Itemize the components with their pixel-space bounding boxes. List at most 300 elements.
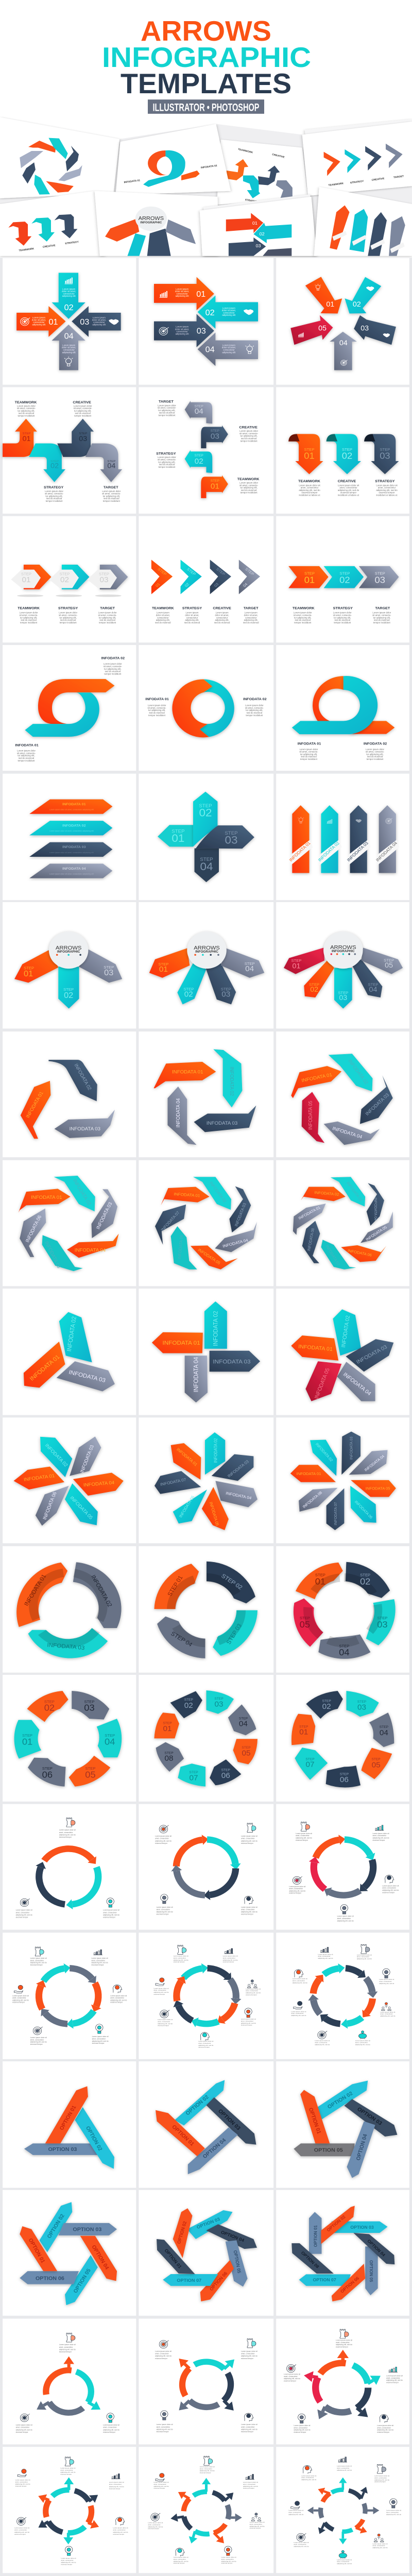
callout: mind: eiusmod tempor — [110, 2002, 123, 2004]
callout: mind — [241, 1896, 258, 1916]
panel: six 3D petals — [3, 1417, 136, 1543]
arrow 01: 01 — [326, 300, 335, 308]
callout: team: Lorem ipsum dolor sit — [246, 1988, 261, 1990]
callout: idea: adipiscing elit, sed do — [386, 2513, 401, 2515]
center badge: INFOGRAPHIC — [332, 950, 355, 953]
callout: strategy: eiusmod tempor — [374, 2481, 386, 2483]
callout: strategy: eiusmod tempor — [59, 2351, 72, 2353]
label: teamwork: amet, consectetur — [301, 486, 319, 489]
card: chevrons: CREATIVE — [371, 177, 385, 182]
option 01: OPTION 01 — [59, 2105, 78, 2131]
arrow 04: INFODATA 04 — [193, 1357, 200, 1392]
petal 07: INFODATA 07 — [333, 1502, 338, 1525]
label: infodata 02: sed do eiusmod — [367, 755, 383, 758]
arrow 01 — [3, 419, 37, 457]
label: creative: CREATIVE — [338, 480, 356, 483]
option 08 — [291, 2243, 334, 2274]
callout: savings: adipiscing elit, sed do — [337, 2563, 352, 2565]
label: teamwork: Lorem ipsum dolor — [20, 612, 38, 614]
petal 05 — [65, 1483, 98, 1525]
arc 03: 03 — [377, 1620, 388, 1630]
ring arrows — [39, 1849, 98, 1904]
arrow slate — [323, 2406, 351, 2412]
ribbon 06: INFODATA 06 — [347, 1248, 372, 1258]
block 03: STEP — [84, 1700, 94, 1704]
callout: target: eiusmod tempor — [30, 2043, 43, 2045]
block 07: STEP — [305, 1758, 315, 1761]
arc 01: STEP — [315, 1573, 325, 1577]
petal 02: INFODATA 02 — [315, 1442, 334, 1463]
callout: mind: Lorem ipsum dolor sit — [293, 1978, 307, 1980]
ring arrows — [39, 1968, 98, 2024]
ribbon 02 — [213, 1049, 242, 1108]
petal 02 — [40, 1437, 72, 1477]
petal 05 — [351, 1480, 396, 1497]
callout: idea — [92, 2024, 109, 2044]
arrow 02: 02 — [310, 986, 318, 993]
label: strategy — [44, 486, 64, 502]
panel: four arc arrows — [139, 1546, 273, 1673]
arc 04: STEP — [339, 1644, 349, 1648]
badge: ILLUSTRATOR • PHOTOSHOP — [152, 101, 260, 114]
chevron 02: 02 — [184, 582, 190, 588]
label: infodata 01 — [145, 698, 169, 717]
ribbon 07: INFODATA 07 — [324, 1244, 341, 1266]
ribbon 02: INFODATA 02 — [314, 1190, 339, 1197]
callout: finance: adipiscing elit, sed do — [15, 2483, 30, 2485]
petal 05 — [202, 1487, 229, 1530]
label: strategy: sed do eiusmod — [159, 463, 175, 466]
label: infodata 01: tur adipiscing elit, — [18, 754, 35, 757]
option 03: OPTION 03 — [217, 2108, 242, 2131]
arrow 04: 04 — [64, 332, 74, 341]
callout: strategy: eiusmod tempor — [174, 1961, 185, 1963]
callout: target: Lorem ipsum dolor sit — [315, 2040, 330, 2042]
callout: strategy: adipiscing elit, sed do — [336, 2344, 352, 2346]
arrow 03: consectetur — [176, 330, 188, 333]
label: strategy: Lorem ipsum dolor — [45, 490, 64, 493]
label: teamwork: Lorem ipsum dolor — [294, 612, 312, 614]
chevron 02 — [181, 560, 202, 594]
label: infodata 02: INFODATA 02 — [101, 657, 125, 660]
callout: finance: amet, consectetur — [291, 2012, 304, 2014]
callout: idea — [157, 2411, 173, 2433]
panel: six-arrow circle — [3, 1933, 136, 2059]
label: teamwork: adipiscing elit, sed do — [299, 489, 320, 492]
panel: curled down arrows — [276, 387, 409, 514]
ribbon 03 — [92, 1189, 117, 1238]
option 04 — [353, 2233, 394, 2264]
callout: mind: amet, consectetur — [241, 1909, 255, 1911]
ribbon 06 — [20, 1209, 46, 1257]
arrow 02 — [29, 444, 65, 482]
chevron 02: 02 — [339, 575, 350, 585]
callout: idea: adipiscing elit, sed do — [379, 1982, 394, 1985]
label: infodata 02: tempor incididunt — [246, 714, 263, 717]
callout: finance: amet, consectetur — [153, 2483, 166, 2485]
center badge — [187, 931, 227, 969]
arrow 02 — [193, 792, 217, 846]
label: strategy: Lorem ipsum dolor — [59, 612, 78, 614]
petal 05: INFODATA 05 — [366, 1486, 390, 1491]
panel: option pentagon — [276, 2061, 409, 2188]
callout: target: Lorem ipsum dolor sit — [16, 2424, 32, 2426]
callout: mind: adipiscing elit, sed do — [113, 2531, 128, 2533]
callout: idea: adipiscing elit, sed do — [294, 2429, 311, 2431]
callout: growth — [337, 2457, 352, 2471]
arrow 04: adipiscing elit — [62, 351, 76, 353]
arc 03 — [28, 1628, 108, 1658]
label: target: tur adipiscing elit, — [373, 616, 390, 619]
callout: target: Lorem ipsum dolor sit — [155, 2350, 171, 2352]
block 07 — [295, 1748, 328, 1780]
bar 04: Lorem ipsum dolor sit amet, consectetur adipiscing elit — [49, 873, 94, 875]
callout: idea: Lorem ipsum dolor sit — [92, 2036, 109, 2038]
callout: growth: amet, consectetur — [223, 1957, 235, 1959]
arrow 01: adipiscing elit — [32, 324, 46, 326]
ribbon 03 — [229, 1187, 251, 1232]
arrow 01: STEP — [171, 828, 185, 834]
arrow 03 — [334, 968, 352, 1009]
callout: strategy: Lorem ipsum dolor sit — [357, 1954, 372, 1956]
label: strategy: incididunt ut labore et — [376, 494, 398, 496]
callout: idea: eiusmod tempor — [221, 2562, 232, 2564]
callout: target: adipiscing elit, sed do — [289, 1890, 305, 1892]
label: creative: amet, consectetur — [339, 486, 357, 489]
callout: strategy: adipiscing elit, sed do — [241, 2355, 258, 2357]
block 05 — [362, 1748, 392, 1779]
label: teamwork: TEAMWORK — [152, 607, 174, 611]
callout: target: amet, consectetur — [14, 2529, 27, 2531]
card: arrow steps: TEAMWORK — [237, 148, 253, 155]
block 06 — [326, 1766, 360, 1787]
callout: target: eiusmod tempor — [148, 2528, 159, 2530]
callout: mind: Lorem ipsum dolor sit — [382, 1885, 399, 1887]
arc 01 — [16, 1563, 67, 1627]
callout: mind: Lorem ipsum dolor sit — [198, 2040, 214, 2042]
arrow 01 — [288, 805, 313, 873]
label: strategy: STRATEGY — [44, 486, 64, 489]
callout: idea: Lorem ipsum dolor sit — [379, 1978, 394, 1980]
arrow 01: 01 — [293, 962, 301, 970]
arrow orange — [356, 2519, 363, 2530]
ribbon 07 — [321, 1240, 356, 1269]
label: strategy: consectetur — [186, 616, 198, 619]
panel: eight outward arrows — [276, 2447, 409, 2573]
chevron 04: STEP — [244, 567, 255, 577]
label: infodata 02 — [243, 698, 267, 717]
panel: up arrows with bands — [276, 774, 409, 900]
label: teamwork: sit amet, consecte- — [19, 614, 38, 616]
label: creative: Lorem ipsum dolor — [74, 404, 92, 407]
callout: idea: amet, consectetur — [157, 2426, 170, 2428]
callout: target: adipiscing elit, sed do — [284, 2378, 300, 2380]
label: infodata 02: tempor incididunt — [104, 673, 122, 675]
callout: mind: amet, consectetur — [174, 2558, 186, 2560]
block 03: STEP — [357, 1700, 366, 1704]
label: target: tempor incididunt — [103, 500, 121, 502]
callout: idea: amet, consectetur — [379, 1980, 391, 1982]
petal 03 — [212, 1454, 253, 1481]
callout: mind: amet, consectetur — [293, 1980, 305, 1982]
block 02 — [27, 1691, 68, 1722]
ribbon 02 — [48, 1060, 97, 1101]
label: strategy: sit amet, consecte- — [59, 614, 78, 616]
arrow 02 — [200, 679, 234, 737]
callout: growth: Lorem ipsum dolor sit — [337, 2465, 352, 2467]
callout: strategy — [59, 1818, 76, 1838]
label: strategy: STRATEGY — [182, 607, 202, 611]
chevron 03: 03 — [100, 576, 109, 584]
chevron 02 — [49, 565, 89, 597]
label: infodata 01: tempor incididunt — [300, 758, 318, 760]
ribbon 05 — [191, 1245, 238, 1269]
arrow 01: 01 — [48, 318, 58, 327]
ribbon 03: INFODATA 03 — [364, 1092, 390, 1116]
panel: header — [0, 0, 412, 258]
panel: winding arrows — [3, 387, 136, 514]
arrow 02: 02 — [353, 300, 361, 308]
callout: strategy: amet, consectetur — [59, 1832, 73, 1834]
callout: mind — [301, 2465, 317, 2481]
label: infodata 02: sit amet, consecte- — [245, 707, 264, 709]
ribbon 01 — [21, 1081, 50, 1139]
arrow 03: STEP — [338, 991, 348, 995]
label: target: TARGET — [104, 486, 118, 489]
callout: mind: eiusmod tempor — [377, 2431, 390, 2433]
block 02: STEP — [322, 1700, 331, 1703]
callout: strategy: amet, consectetur — [174, 1957, 186, 1959]
callout: mind: eiusmod tempor — [241, 2431, 254, 2433]
petal 03: INFODATA 03 — [349, 1436, 354, 1460]
callout: idea — [294, 2414, 311, 2433]
arrow 01: STEP — [211, 479, 219, 483]
callout: idea: adipiscing elit, sed do — [337, 1920, 354, 1922]
label: strategy: sed do eiusmod — [335, 619, 351, 621]
label: target: Lorem ipsum — [245, 612, 258, 614]
arrow orange — [214, 2524, 226, 2538]
option 01: OPTION 01 — [313, 2225, 318, 2247]
callout: growth: Lorem ipsum dolor sit — [109, 2481, 124, 2483]
block 05: STEP — [242, 1746, 251, 1750]
block 01: STEP — [299, 1725, 308, 1728]
bar 03: INFODATA 03 — [62, 845, 86, 849]
label: strategy — [375, 480, 398, 496]
arrow 03 — [57, 1361, 115, 1392]
panel: seven ribbons — [139, 1160, 273, 1286]
callout: growth — [386, 2367, 403, 2383]
callout: finance: Lorem ipsum dolor sit — [153, 1987, 169, 1989]
chevron 01: 01 — [22, 576, 31, 584]
arrow teal — [332, 2483, 344, 2493]
callout: mind: eiusmod tempor — [174, 2562, 185, 2564]
panel: slanted bars — [3, 774, 136, 900]
label: creative — [239, 426, 259, 442]
arrow 02 — [333, 1309, 361, 1355]
callout: team: adipiscing elit, sed do — [380, 2015, 396, 2017]
callout: target: amet, consectetur — [16, 1911, 30, 1913]
callout: idea: adipiscing elit, sed do — [92, 2040, 109, 2042]
arrow teal lower — [68, 2527, 85, 2537]
arc 04: 04 — [339, 1648, 350, 1657]
panel: thin chevrons — [139, 516, 273, 642]
arrow 02: STEP — [50, 460, 59, 463]
label: teamwork — [298, 480, 321, 496]
bar 03 — [29, 842, 112, 857]
block 02: 02 — [322, 1703, 331, 1711]
callout: mind: amet, consectetur — [301, 2477, 314, 2479]
arrow 02 — [204, 1301, 227, 1349]
option 08: OPTION 08 — [300, 2250, 320, 2269]
callout: strategy — [336, 2329, 352, 2348]
petal 07: INFODATA 07 — [160, 1478, 186, 1487]
callout: finance — [153, 2473, 169, 2489]
label: infodata 01: tur adipiscing elit, — [300, 753, 317, 755]
label: target: sit amet, consecte- — [98, 614, 117, 616]
panel: seven outward arrows — [139, 2447, 273, 2573]
callout: team — [246, 1980, 261, 1996]
callout: idea: Lorem ipsum dolor sit — [61, 2557, 76, 2560]
option 06 — [20, 2271, 79, 2284]
option 01 — [45, 2086, 88, 2143]
callout: mind: Lorem ipsum dolor sit — [301, 2475, 317, 2477]
callout: mind: Lorem ipsum dolor sit — [110, 1995, 127, 1997]
arc 05: 05 — [300, 1620, 310, 1630]
arrow 01: STEP — [304, 447, 315, 452]
block 07: 07 — [190, 1774, 198, 1783]
arc 02: INFODATA 02 — [90, 1574, 113, 1608]
label: target: TARGET — [375, 607, 390, 611]
callout: mind: adipiscing elit, sed do — [241, 1911, 258, 1913]
arrow 03: 03 — [211, 433, 219, 440]
ribbon 06: INFODATA 06 — [177, 1234, 184, 1260]
option 01 — [157, 2239, 195, 2274]
callout: target: eiusmod tempor — [16, 1916, 29, 1918]
block 08: 08 — [165, 1755, 174, 1762]
ribbon 07 — [155, 1205, 186, 1245]
arrow 02 — [198, 296, 258, 329]
label: target: TARGET — [100, 607, 115, 611]
label: strategy — [156, 452, 177, 468]
label: teamwork: sed do eiusmod — [295, 619, 311, 621]
label: infodata 02: INFODATA 02 — [364, 742, 387, 745]
arc 04 — [318, 1634, 370, 1659]
panel: flower of three arrows — [3, 902, 136, 1028]
label: teamwork: adipiscing elit, — [156, 619, 170, 621]
label: strategy: tur adipiscing elit, — [45, 495, 63, 497]
petal 02 — [310, 1439, 337, 1476]
callout: idea: amet, consectetur — [241, 2020, 253, 2022]
card: arrow steps — [217, 140, 308, 205]
callout: growth: amet, consectetur — [372, 1835, 387, 1837]
label: strategy: sit amet, consecte- — [45, 493, 64, 495]
label: infodata 02: INFODATA 02 — [243, 698, 267, 701]
option 04 — [347, 2121, 375, 2178]
ribbon 02 — [54, 1176, 95, 1211]
option 04 — [207, 2224, 257, 2249]
callout: target: Lorem ipsum dolor sit — [289, 1886, 305, 1888]
arrow 05: 05 — [385, 961, 393, 969]
panel: six ribbons — [3, 1160, 136, 1286]
panel: cross arrows — [3, 258, 136, 385]
chevron 04 — [239, 560, 260, 594]
petal 04 — [215, 1481, 258, 1507]
block 05: STEP — [371, 1758, 381, 1761]
option 01: OPTION 01 — [170, 2124, 195, 2147]
callout: mind — [241, 2413, 258, 2433]
chevron 01: 01 — [304, 575, 315, 585]
arrow 01: INFODATA 01 — [162, 1341, 200, 1346]
ribbon 04 — [215, 1222, 257, 1252]
ribbon 01: INFODATA 01 — [25, 1091, 44, 1119]
callout: growth: Lorem ipsum dolor sit — [243, 2481, 258, 2483]
arrow 03: Lorem ipsum — [176, 326, 189, 328]
callout: savings: Lorem ipsum dolor sit — [355, 2040, 370, 2042]
arrow 03: INFODATA 03 — [355, 1344, 388, 1365]
option 07: OPTION 07 — [177, 2278, 201, 2283]
callout: growth: eiusmod tempor — [372, 1839, 385, 1841]
arrow 04 — [221, 948, 264, 978]
callout: idea: eiusmod tempor — [61, 2564, 72, 2566]
label: target: tur adipiscing elit, — [103, 495, 120, 497]
petal 04 — [73, 1473, 124, 1496]
panel: seven 3D petals — [139, 1417, 273, 1543]
callout: idea: eiusmod tempor — [157, 2431, 169, 2433]
title: ARROWS — [141, 15, 271, 46]
label: teamwork: sit amet, consecte- — [239, 484, 259, 486]
label: teamwork — [152, 607, 174, 624]
label: teamwork: sit amet, consecte- — [17, 407, 36, 410]
label: infodata 02: sed do eiusmod — [247, 711, 263, 714]
callout: idea — [103, 1898, 119, 1918]
callout: growth: amet, consectetur — [92, 1959, 106, 1961]
card: flower arrows — [95, 191, 218, 256]
label: infodata 02: tur adipiscing elit, — [104, 668, 122, 670]
arrow 03: STEP — [380, 447, 390, 452]
bar 01: INFODATA 01 — [62, 803, 86, 806]
block 03: 03 — [214, 1701, 224, 1708]
arrow 03 — [210, 1351, 260, 1371]
label: target: consectetur — [245, 616, 257, 619]
arrow 02: INFODATA 02 — [66, 1316, 78, 1352]
arc 03: STEP 03 — [226, 1623, 243, 1646]
callout: mind: Lorem ipsum dolor sit — [241, 1906, 258, 1908]
block 04: STEP — [239, 1717, 248, 1720]
chevron 03 — [87, 565, 128, 597]
label: creative: Lorem ipsum dolor sit — [338, 484, 359, 486]
label: teamwork: eiusmod tempor — [302, 492, 318, 494]
callout: strategy — [200, 2456, 215, 2473]
callout: strategy: adipiscing elit, sed do — [374, 2479, 390, 2481]
callout: target — [155, 1825, 171, 1844]
arrow orange upper — [323, 2491, 330, 2502]
center badge: INFOGRAPHIC — [195, 950, 218, 954]
label: teamwork: tur adipiscing elit, — [294, 616, 311, 619]
option 01: OPTION 01 — [163, 2248, 183, 2269]
label: teamwork: consectetur — [157, 616, 169, 619]
petal 07 — [327, 1488, 344, 1530]
arrow 01: consectetur — [176, 293, 188, 295]
callout: team — [380, 2003, 396, 2017]
label: creative: Lorem ipsum — [216, 612, 229, 614]
arrow 04: INFODATA 04 — [342, 1372, 372, 1397]
callout: finance: amet, consectetur — [153, 1989, 166, 1991]
panel: two-arrow ring — [139, 645, 273, 771]
title — [102, 15, 311, 99]
arrow 03: STEP — [79, 432, 87, 435]
callout: idea — [157, 1894, 173, 1916]
ribbon 03: INFODATA 03 — [70, 1126, 100, 1131]
